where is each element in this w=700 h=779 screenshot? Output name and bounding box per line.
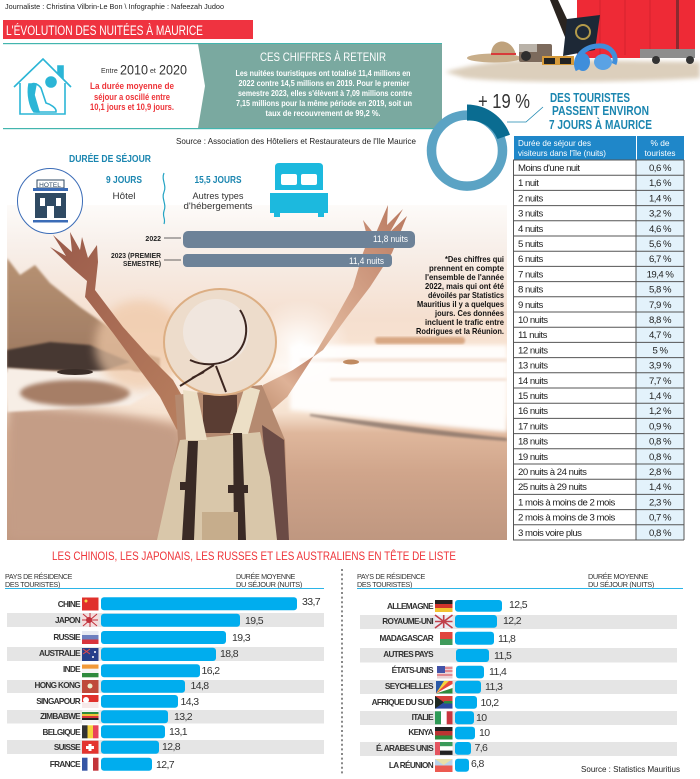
text: average stay range xyxy=(90,81,174,113)
note: data scope: *Des chiffres qui xyxy=(445,255,504,264)
bars xyxy=(101,597,297,771)
table rows: 0,9 % xyxy=(649,422,672,432)
values: 16,2 xyxy=(202,665,220,677)
values: 10 xyxy=(479,727,490,739)
table header: touristes xyxy=(644,148,676,158)
values: 12,8 xyxy=(162,741,181,753)
bar 2023 xyxy=(111,253,392,268)
byline: Journaliste : Christina Vilbrin-Le Bon \ Infographie : Nafeezah Judoo xyxy=(5,2,224,11)
note: data scope: Rodrigues et la Réunion. xyxy=(416,327,504,336)
values: 12,7 xyxy=(156,759,175,771)
stat: other accommodation xyxy=(184,174,253,211)
bar 2022 xyxy=(145,231,415,248)
note: data scope: l'ensemble de l'année xyxy=(425,273,504,282)
stat: plus 19 percent: + 19 % xyxy=(478,91,530,113)
table rows: 0,7 % xyxy=(649,512,672,524)
text: period: 2020 xyxy=(159,62,187,78)
values: 11,4 xyxy=(489,666,507,678)
table rows: 0,6 % xyxy=(649,163,672,174)
table rows: 4 nuits xyxy=(518,224,543,235)
values: 11,3 xyxy=(485,681,503,693)
table rows: 15 nuits xyxy=(518,391,548,402)
country labels: AFRIQUE DU SUD xyxy=(372,698,434,707)
icon: house with traveller xyxy=(14,59,71,114)
country labels: INDE xyxy=(63,665,81,674)
country labels: HONG KONG xyxy=(34,681,80,690)
stat: other accommodation: Autres types xyxy=(192,191,244,201)
values: 19,3 xyxy=(232,632,251,644)
column headers: DURÉE MOYENNE xyxy=(236,572,295,581)
heading: length of stay: DURÉE DE SÉJOUR xyxy=(69,152,151,165)
table rows: 1 nuit xyxy=(518,178,539,189)
country labels: ÉTATS-UNIS xyxy=(392,665,434,675)
heading: tourists stay seven days: DES TOURISTES xyxy=(550,90,630,105)
text: period: 2010 xyxy=(120,62,148,78)
country labels: BELGIQUE xyxy=(42,728,81,737)
icon: hotel: HOTEL xyxy=(39,182,61,189)
bars xyxy=(455,600,502,772)
table rows: 1,2 % xyxy=(649,406,672,417)
table rows: 19 nuits xyxy=(518,452,548,463)
values: 14,8 xyxy=(190,680,209,692)
country labels: ROYAUME-UNI xyxy=(382,617,433,626)
table rows: 25 nuits à 29 nuits xyxy=(518,482,587,493)
table rows: 12 nuits xyxy=(518,346,548,356)
values: 18,8 xyxy=(220,648,239,660)
table rows: 9 nuits xyxy=(518,300,543,311)
text: average stay range: séjour a oscillé entre xyxy=(94,92,170,103)
table rows: 2,3 % xyxy=(649,498,672,508)
table rows: 2 mois à moins de 3 mois xyxy=(518,512,615,524)
torso xyxy=(174,385,286,485)
table rows: 14 nuits xyxy=(518,376,548,387)
note: data scope: 2022, mais qui ont été xyxy=(425,282,504,291)
icon: hotel xyxy=(18,168,82,234)
bar chart: right countries xyxy=(357,572,683,772)
text: key figures paragraph: Les nuitées touristiques ont totalisé 11,4 millions en xyxy=(236,69,411,78)
heading: key figures: CES CHIFFRES À RETENIR xyxy=(260,49,386,64)
table rows: 3,2 % xyxy=(649,208,672,220)
table rows: 2 nuits xyxy=(518,194,543,204)
country labels: RUSSIE xyxy=(53,633,81,642)
table rows: 0,8 % xyxy=(649,528,672,539)
heading: tourists stay seven days: 7 JOURS À MAURICE xyxy=(549,117,652,132)
country labels: ALLEMAGNE xyxy=(387,602,434,611)
values: 19,5 xyxy=(245,615,264,627)
table rows: 7,7 % xyxy=(649,376,672,387)
table header xyxy=(514,136,684,160)
source: hotel association: Source : Association des Hôteliers et Restaurateurs de l'Ile Maurice xyxy=(176,136,416,146)
bar 2023: 2023 (PREMIER xyxy=(111,253,161,260)
table rows: 8 nuits xyxy=(518,284,543,296)
text: average stay range: La durée moyenne de xyxy=(90,81,174,92)
country labels xyxy=(372,602,434,770)
text: key figures paragraph: taux de recouvrement de 99,2 %. xyxy=(266,109,380,118)
note: data scope: prennent en compte xyxy=(429,264,504,273)
text: key figures paragraph xyxy=(236,69,412,118)
title banner: L'ÉVOLUTION DES NUITÉES À MAURICE xyxy=(6,23,203,38)
table header: % de xyxy=(650,138,670,148)
values: 12,2 xyxy=(503,615,522,627)
table rows xyxy=(518,163,674,539)
stat: other accommodation: d'hébergements xyxy=(184,201,253,211)
text: period xyxy=(101,62,187,78)
country labels: SINGAPOUR xyxy=(36,697,81,706)
table rows: 3,9 % xyxy=(649,360,672,372)
country labels: AUSTRALIE xyxy=(39,649,81,658)
column headers: DU SÉJOUR (NUITS) xyxy=(236,580,302,589)
source: Statistics Mauritius: Source : Statistics Mauritius xyxy=(581,764,680,774)
column headers: DU SÉJOUR (NUITS) xyxy=(588,580,654,589)
table rows: 1,4 % xyxy=(649,482,672,493)
table rows: 4,7 % xyxy=(649,330,672,341)
bar chart: nights 2022 and 2023 xyxy=(111,231,415,268)
values: 11,8 xyxy=(498,633,516,645)
table rows: 13 nuits xyxy=(518,360,548,372)
note: data scope: dévoilés par Statistics xyxy=(428,291,504,300)
table rows: 2,8 % xyxy=(649,467,672,478)
note: data scope: incluent le trafic entre xyxy=(425,318,504,327)
table rows: 1 mois à moins de 2 mois xyxy=(518,498,615,508)
values: 11,5 xyxy=(494,650,512,662)
table rows: 1,4 % xyxy=(649,194,672,204)
bar 2022: 2022 xyxy=(145,236,161,243)
text: period: Entre xyxy=(101,68,118,75)
panel: key figures xyxy=(198,44,442,128)
photo: woman on a beach xyxy=(7,205,507,540)
country labels: JAPON xyxy=(55,616,81,625)
table rows: 3 nuits xyxy=(518,208,543,220)
bar 2023: SEMESTRE) xyxy=(123,261,161,268)
table: length of stay distribution xyxy=(513,136,684,540)
table rows: 0,8 % xyxy=(649,436,672,448)
table rows: 19,4 % xyxy=(647,270,674,280)
text: key figures paragraph: 7,15 millions pour la même période en 2019, soit un xyxy=(236,99,412,108)
column headers xyxy=(357,572,683,589)
country labels: KENYA xyxy=(408,728,434,737)
table rows: 5 % xyxy=(652,346,668,356)
country labels: SUISSE xyxy=(54,743,81,752)
country labels: SEYCHELLES xyxy=(385,682,434,691)
stat: other accommodation: 15,5 JOURS xyxy=(194,174,242,186)
table rows: 8,8 % xyxy=(649,315,672,326)
bar 2023: 11,4 nuits xyxy=(349,256,384,266)
column headers: DURÉE MOYENNE xyxy=(588,572,648,581)
table rows: 1,6 % xyxy=(649,178,672,189)
note: data scope xyxy=(416,255,504,336)
dotted divider xyxy=(341,569,343,775)
table rows: 10 nuits xyxy=(518,315,548,326)
bar chart: left countries xyxy=(5,572,324,771)
values: 14,3 xyxy=(180,696,199,708)
table header: visiteurs dans l'île (nuits) xyxy=(518,148,606,158)
column headers: PAYS DE RÉSIDENCE xyxy=(357,572,425,581)
text: key figures paragraph: 2022 contre 14,5 millions en 2019. Pour le premier xyxy=(238,79,410,88)
backpack xyxy=(157,386,277,540)
column headers: DES TOURISTES) xyxy=(357,580,412,589)
values xyxy=(156,596,321,771)
bar 2022: 11,8 nuits xyxy=(373,234,408,244)
values: 10 xyxy=(476,712,487,724)
heading: top nationalities: LES CHINOIS, LES JAPONAIS, LES RUSSES ET LES AUSTRALIENS EN TÊTE DE LISTE xyxy=(52,550,456,563)
table rows: 6,7 % xyxy=(649,254,672,265)
stat: hotel stay: 9 JOURS xyxy=(106,174,142,186)
sun hat xyxy=(164,289,276,395)
values: 12,5 xyxy=(509,599,528,611)
values: 13,1 xyxy=(169,726,188,738)
table rows: 7,9 % xyxy=(649,300,672,311)
table rows: 18 nuits xyxy=(518,436,548,448)
country labels xyxy=(34,600,81,769)
donut chart: 19 percent xyxy=(432,104,543,186)
country labels: ZIMBABWE xyxy=(40,712,81,721)
table rows: 17 nuits xyxy=(518,422,548,432)
note: data scope: Mauritius il y a quelques xyxy=(417,300,504,309)
wavy divider xyxy=(163,173,165,224)
table rows: 5 nuits xyxy=(518,239,543,250)
woman's left arm and hand xyxy=(50,232,190,430)
table rows: 3 mois voire plus xyxy=(518,528,582,539)
country labels: AUTRES PAYS xyxy=(383,650,434,659)
table rows: 4,6 % xyxy=(649,224,672,235)
table rows: 1,4 % xyxy=(649,391,672,402)
heading: tourists stay seven days: PASSENT ENVIRON xyxy=(552,103,649,118)
values: 10,2 xyxy=(480,697,499,709)
text: average stay range: 10,1 jours et 10,9 jours. xyxy=(90,102,174,113)
flags xyxy=(435,600,452,772)
country labels: CHINE xyxy=(58,600,81,609)
stat: hotel stay: Hôtel xyxy=(112,191,136,201)
stat: hotel stay xyxy=(106,174,142,201)
heading: tourists stay seven days xyxy=(549,90,652,132)
table rows: 5,6 % xyxy=(649,239,672,250)
table rows: 20 nuits à 24 nuits xyxy=(518,467,587,478)
values: 7,6 xyxy=(474,742,488,754)
table rows: 0,8 % xyxy=(649,452,672,463)
icon: bed xyxy=(270,163,328,217)
table rows: 5,8 % xyxy=(649,284,672,296)
top illustration: luggage on sand xyxy=(445,0,700,82)
table header: Durée de séjour des xyxy=(518,138,591,148)
column headers: DES TOURISTES) xyxy=(5,580,60,589)
text: period: et xyxy=(150,68,156,75)
text: key figures paragraph: semestre 2023, elles s'élèvent à 7,09 millions contre xyxy=(238,89,412,98)
table rows: 7 nuits xyxy=(518,270,543,280)
country labels: ITALIE xyxy=(412,713,434,722)
table rows: 11 nuits xyxy=(518,330,548,341)
flags xyxy=(82,598,98,771)
country labels: LA RÉUNION xyxy=(389,760,434,770)
panel: key period xyxy=(3,43,442,129)
table rows: 6 nuits xyxy=(518,254,543,265)
woman's right arm and hand xyxy=(287,205,407,397)
country labels: FRANCE xyxy=(50,760,81,769)
table rows: 16 nuits xyxy=(518,406,548,417)
country labels: MADAGASCAR xyxy=(379,634,434,643)
country labels: É. ARABES UNIS xyxy=(376,743,434,753)
note: data scope: jours. Ces données xyxy=(434,309,504,318)
column headers xyxy=(5,572,324,589)
column headers: PAYS DE RÉSIDENCE xyxy=(5,572,72,581)
values: 13,2 xyxy=(174,711,193,723)
values: 6,8 xyxy=(471,758,485,770)
values xyxy=(471,599,528,770)
table rows: Moins d'une nuit xyxy=(518,163,580,174)
values: 33,7 xyxy=(302,596,321,608)
